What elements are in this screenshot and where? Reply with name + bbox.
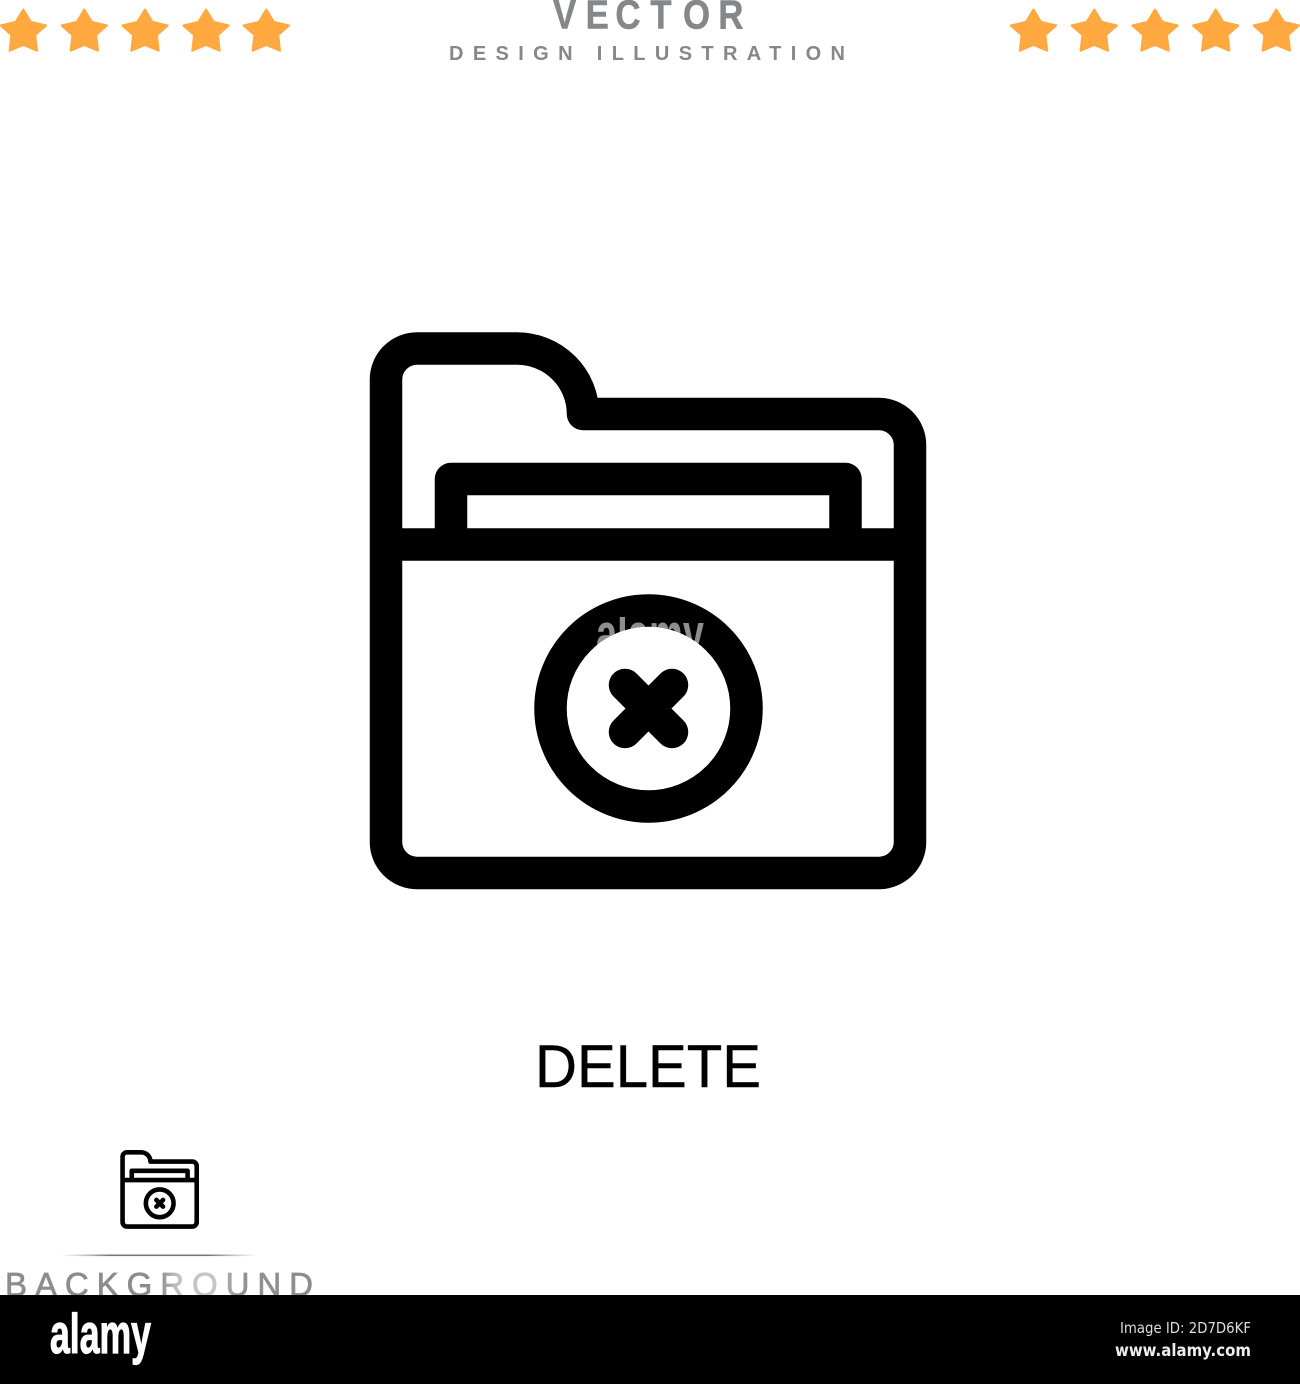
folder pocket line <box>386 528 910 561</box>
icon: folder with delete mark <box>386 348 910 873</box>
delete circle <box>550 610 746 806</box>
website url: www.alamy.com <box>1115 1341 1251 1361</box>
watermark: alamy over ring: alamy <box>596 602 704 667</box>
delete cross <box>625 685 672 732</box>
divider line <box>60 1254 258 1256</box>
logo: alamy: alamy <box>50 1302 151 1365</box>
folder outline <box>386 348 910 873</box>
subheading: DESIGN ILLUSTRATION: DESIGN ILLUSTRATION <box>449 43 845 65</box>
footer bar <box>0 1295 1300 1384</box>
stars: top left rating <box>1 10 289 51</box>
footer background <box>0 1295 1300 1384</box>
icon: small folder preview <box>123 1152 197 1227</box>
inner document <box>451 479 846 544</box>
stars: top right rating <box>1011 10 1299 51</box>
label: DELETE: DELETE <box>535 1032 761 1100</box>
image id: Image ID: 2D7D6KF <box>1120 1319 1251 1337</box>
label: BACKGROUND: BACKGROUND <box>5 1266 313 1303</box>
